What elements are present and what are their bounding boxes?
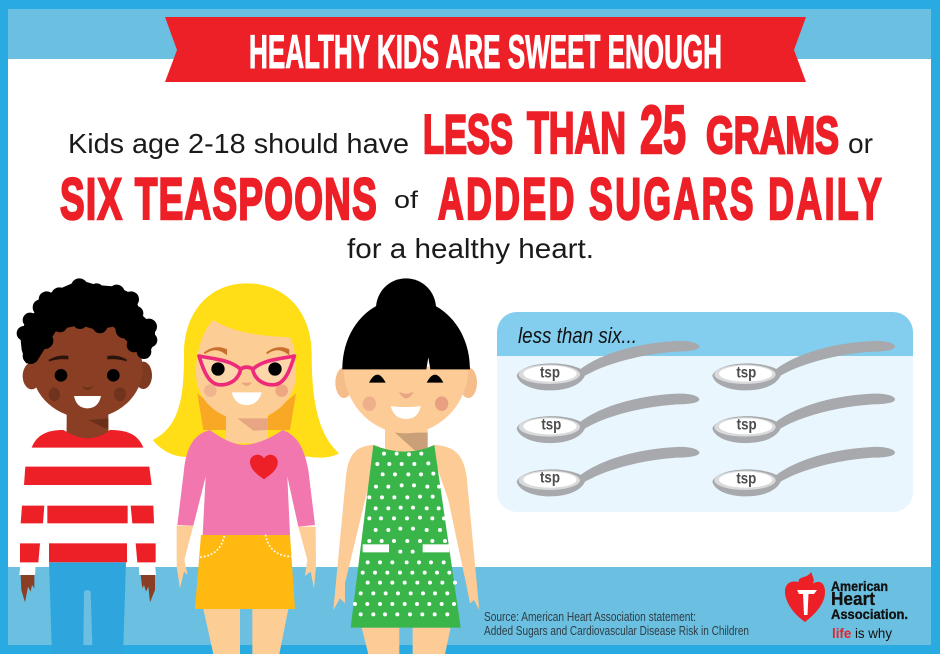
spoon 5 [517, 447, 699, 496]
logo: American Heart Association: Association. [831, 607, 908, 622]
headline text: of [394, 187, 418, 214]
headline text [60, 92, 884, 264]
headline text: THAN [527, 101, 626, 166]
character: boy in striped shirt [17, 278, 157, 654]
source citation [484, 610, 749, 638]
logo: American Heart Association: Heart [831, 589, 875, 609]
headline text: SIX TEASPOONS [60, 167, 378, 232]
source citation: Added Sugars and Cardiovascular Disease Risk in Children [484, 624, 749, 638]
spoon 6: tsp [736, 470, 756, 487]
character: blonde girl with pink glasses [153, 283, 339, 654]
spoon 1: tsp [540, 365, 560, 382]
headline text: LESS [423, 103, 513, 165]
title banner [165, 17, 806, 82]
spoon 1 [517, 341, 699, 390]
spoons [517, 341, 895, 496]
headline text: GRAMS [706, 107, 839, 165]
character: girl with black bun and green dress [333, 278, 479, 654]
spoon 6 [712, 447, 895, 496]
spoon 3: tsp [541, 417, 561, 434]
spoon 3 [517, 394, 699, 443]
logo: American Heart Association: American [831, 579, 888, 594]
icon: heart and torch [785, 573, 825, 622]
logo: American Heart Association [785, 573, 908, 641]
headline text: 25 [640, 92, 686, 168]
spoon 5: tsp [540, 469, 560, 486]
panel: less than six teaspoons [497, 312, 913, 512]
logo: American Heart Association: life is why [832, 625, 892, 641]
headline text: or [848, 128, 873, 159]
headline text: for a healthy heart. [347, 233, 594, 264]
headline text: Kids age 2-18 should have [68, 128, 409, 159]
spoon 2: tsp [736, 365, 756, 382]
spoon 4: tsp [737, 417, 757, 434]
panel heading: less than six... [518, 323, 637, 348]
source citation: Source: American Heart Association statement: [484, 610, 696, 624]
spoon 2 [712, 341, 895, 390]
spoon 4 [712, 394, 895, 443]
